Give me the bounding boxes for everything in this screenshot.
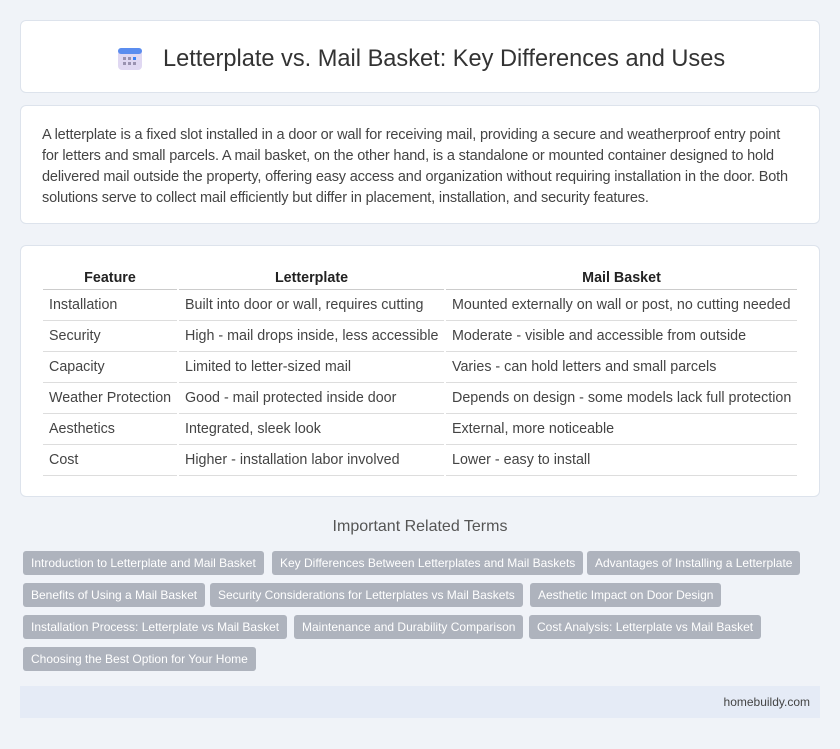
comparison table: Feature [84,270,136,286]
related terms heading: Important Related Terms [333,518,507,535]
related terms tags: Benefits of Using a Mail Basket [31,588,197,602]
related terms tags: Choosing the Best Option for Your Home [31,652,248,666]
comparison table: Cost [49,452,78,468]
comparison table: Depends on design - some models lack full protection [452,390,791,406]
header card [20,20,820,93]
related terms tags: Key Differences Between Letterplates and Mail Baskets [280,556,575,570]
comparison table: Security [49,328,101,344]
related terms tags: Advantages of Installing a Letterplate [595,556,792,570]
comparison table: Integrated, sleek look [185,421,321,437]
comparison table: Aesthetics [49,421,115,437]
comparison table: Weather Protection [49,390,171,406]
title: Letterplate vs. Mail Basket: Key Differences and Uses [163,46,725,72]
related terms tags: Installation Process: Letterplate vs Mail Basket [31,620,279,634]
comparison table: Higher - installation labor involved [185,452,400,468]
comparison table: Capacity [49,359,105,375]
comparison table: Mounted externally on wall or post, no cutting needed [452,297,791,313]
comparison table: External, more noticeable [452,421,614,437]
description card: A letterplate is a fixed slot installed in a door or wall for receiving mail, providing a secure and weatherproof entry point for letters and small parcels. A mail basket, on the other hand, is a standalone or mounted container designed to hold delivered mail outside the property, offering easy access and organization without requiring installation in the door. Both solutions serve to collect mail efficiently but differ in placement, installation, and security features. [42,127,788,206]
comparison table: Built into door or wall, requires cutting [185,297,423,313]
related terms tags: Aesthetic Impact on Door Design [538,588,713,602]
comparison table: Lower - easy to install [452,452,590,468]
comparison table: Varies - can hold letters and small parcels [452,359,716,375]
comparison table: Limited to letter-sized mail [185,359,351,375]
comparison table: Good - mail protected inside door [185,390,396,406]
comparison table card [20,245,820,497]
footer: homebuildy.com [724,695,810,709]
description card [20,105,820,224]
related terms tags: Introduction to Letterplate and Mail Basket [31,556,256,570]
comparison table [43,270,797,476]
related terms tags: Maintenance and Durability Comparison [302,620,515,634]
comparison table: Installation [49,297,117,313]
footer [20,686,820,718]
comparison table: High - mail drops inside, less accessible [185,328,438,344]
related terms tags: Cost Analysis: Letterplate vs Mail Basket [537,620,753,634]
comparison table: Letterplate [275,270,348,286]
comparison table: Moderate - visible and accessible from outside [452,328,746,344]
comparison table: Mail Basket [582,270,661,286]
icon: calendar [118,48,142,70]
related terms tags: Security Considerations for Letterplates vs Mail Baskets [218,588,515,602]
